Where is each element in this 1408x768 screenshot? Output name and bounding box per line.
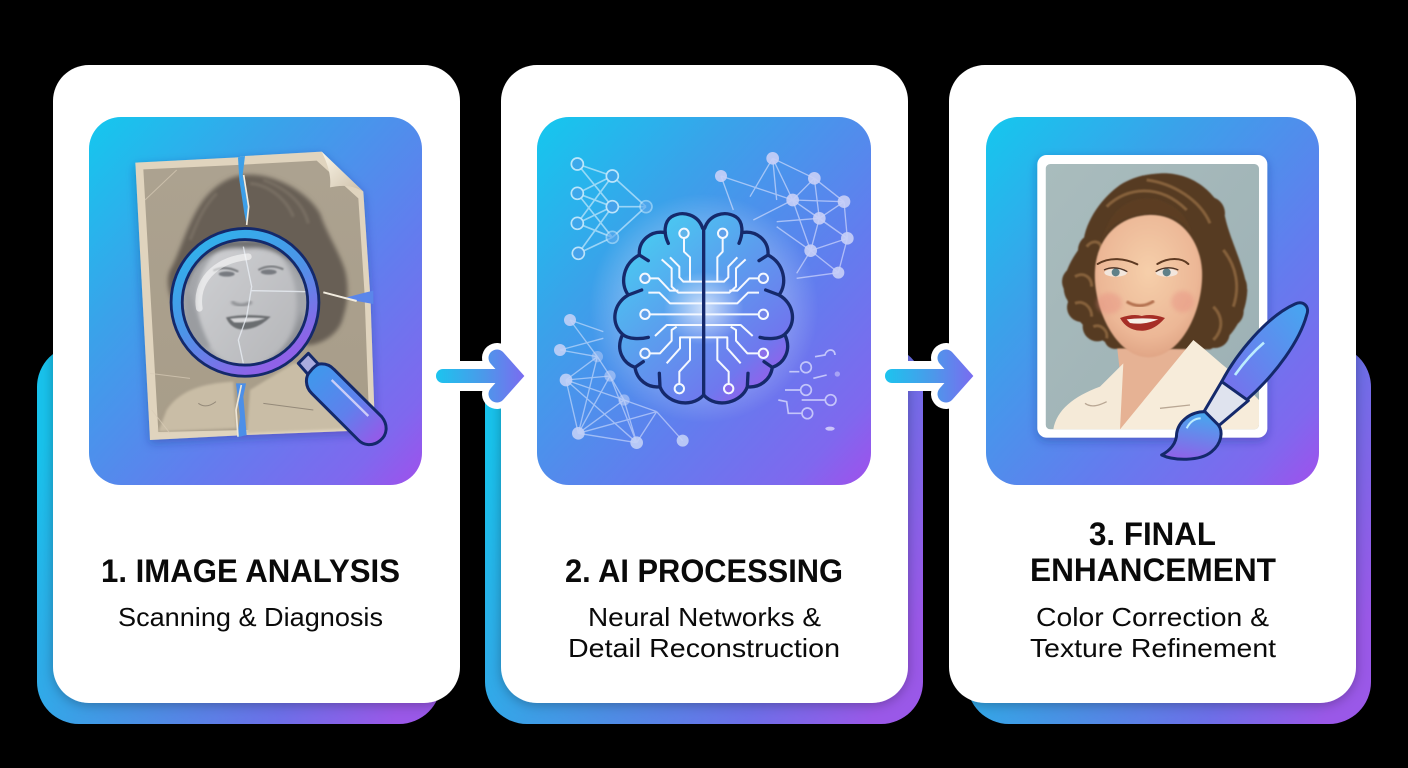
panel: step 2 ai processing xyxy=(485,65,923,724)
icon: damaged old photograph xyxy=(135,152,375,440)
icon: neural network bottom left xyxy=(554,314,689,449)
text: step 1 description: Scanning & Diagnosis xyxy=(118,602,383,632)
panel: step 1 image analysis xyxy=(37,65,460,724)
panel: step 3 final enhancement xyxy=(949,65,1371,724)
card 3 gradient backing xyxy=(967,345,1371,724)
tear: top xyxy=(238,156,248,225)
brain outline xyxy=(615,214,792,403)
tear: bottom xyxy=(236,383,247,437)
heading: step 1: 1. IMAGE ANALYSIS xyxy=(101,553,400,589)
icon: paint brush xyxy=(1162,303,1308,459)
magnifier ring xyxy=(177,234,313,371)
icon: neural network top right xyxy=(715,152,854,279)
magnifier neck xyxy=(298,353,321,377)
arrow: step 2 to step 3 xyxy=(892,358,962,394)
card 3 white surface xyxy=(949,65,1356,703)
text: step 2 description xyxy=(568,602,840,663)
heading: step 3: 3. FINAL xyxy=(1089,516,1216,552)
card 3 illustration tile xyxy=(986,117,1319,485)
portrait face features xyxy=(1098,259,1188,264)
card 1 gradient backing xyxy=(37,345,441,724)
heading: step 3 xyxy=(1030,516,1276,588)
text: step 2 description: Neural Networks & xyxy=(588,602,821,632)
icon: restored colour portrait xyxy=(1037,155,1267,438)
tear: right xyxy=(347,291,373,304)
magnifier handle xyxy=(306,364,386,445)
card 2 gradient backing xyxy=(485,345,923,724)
portrait hair xyxy=(1062,173,1247,349)
card 1 white surface xyxy=(53,65,460,703)
curled corner xyxy=(322,152,363,192)
text: step 3 description xyxy=(1030,602,1277,663)
icon: neural network top left xyxy=(571,158,652,259)
icon: magnifying glass xyxy=(177,234,386,445)
text: step 2 description: Detail Reconstruction xyxy=(568,633,840,663)
portrait face xyxy=(1095,215,1202,357)
text: step 3 description: Color Correction & xyxy=(1036,602,1269,632)
card 2 illustration tile xyxy=(537,117,871,485)
heading: step 2: 2. AI PROCESSING xyxy=(565,553,843,589)
heading: step 3: ENHANCEMENT xyxy=(1030,552,1276,588)
arrow: step 1 to step 2 xyxy=(443,358,513,394)
card 1 illustration tile xyxy=(89,117,422,485)
portrait neck and chest xyxy=(1117,348,1186,430)
lens view of face xyxy=(184,241,306,364)
brain circuit traces xyxy=(640,229,768,393)
portrait shirt xyxy=(1053,363,1123,429)
icon: circuit brain xyxy=(589,193,819,423)
icon: circuit fragments bottom right xyxy=(778,350,840,431)
card 2 white surface xyxy=(501,65,908,703)
text: step 3 description: Texture Refinement xyxy=(1030,633,1277,663)
